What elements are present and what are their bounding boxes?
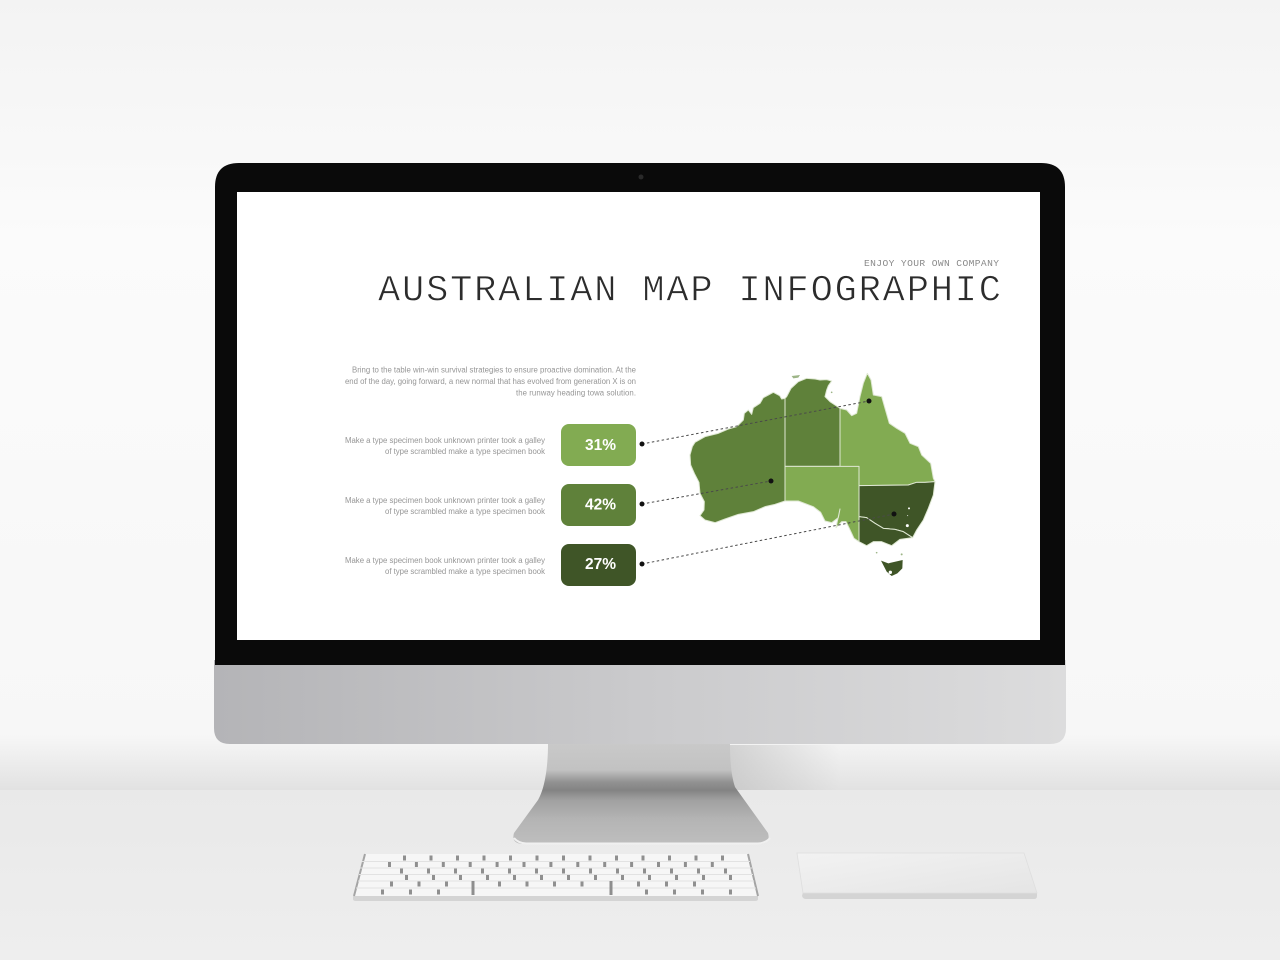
- subtitle: ENJOY YOUR OWN COMPANY: [864, 258, 999, 269]
- monitor bezel: [215, 163, 1065, 665]
- lakes and islands: [889, 507, 910, 574]
- intro text block: Bring to the table win-win survival strategies to ensure proactive domination. At the: [352, 366, 636, 374]
- row text 3: Make a type specimen book unknown printer took a galley: [345, 556, 545, 565]
- intro text block: end of the day, going forward, a new normal that has evolved from generation X is on: [345, 377, 636, 386]
- row text 1: [345, 436, 545, 456]
- row text 2: of type scrambled make a type specimen book: [385, 507, 545, 516]
- monitor chin: [214, 660, 1066, 744]
- Tasmania: [881, 560, 903, 576]
- row text 3: [345, 556, 545, 576]
- row text 2: [345, 496, 545, 516]
- badge 27%: 27%: [585, 556, 616, 573]
- connector line 31% to Queensland: [640, 398, 872, 446]
- Queensland: [840, 373, 935, 486]
- Northern Territory: [785, 378, 840, 466]
- camera: [638, 174, 644, 180]
- Victoria: [859, 517, 913, 546]
- row text 1: Make a type specimen book unknown printer took a galley: [345, 436, 545, 445]
- badge 31%: [561, 424, 636, 466]
- trackpad: [797, 853, 1037, 899]
- badge 31%: 31%: [585, 437, 616, 454]
- intro text block: [345, 366, 636, 398]
- badge 42%: 42%: [585, 496, 616, 514]
- connector line 42% to Western Australia: [640, 478, 774, 506]
- keyboard: [353, 854, 758, 901]
- row text 2: Make a type specimen book unknown printer took a galley: [345, 496, 545, 505]
- New South Wales: [859, 482, 935, 538]
- badge 27%: [561, 544, 636, 586]
- screen: [237, 192, 1040, 640]
- intro text block: the runway heading towa solution.: [516, 388, 636, 398]
- small islands: [792, 375, 903, 555]
- monitor: [214, 163, 1066, 744]
- title: AUSTRALIAN MAP INFOGRAPHIC: [378, 270, 1001, 312]
- Western Australia: [690, 392, 785, 523]
- monitor stand: [513, 744, 770, 844]
- row text 3: of type scrambled make a type specimen book: [385, 567, 545, 576]
- badge 42%: [561, 484, 636, 526]
- row text 1: of type scrambled make a type specimen book: [385, 447, 545, 456]
- connector line 27% to New South Wales: [640, 512, 896, 566]
- map of Australia: [690, 373, 935, 576]
- South Australia: [785, 466, 859, 542]
